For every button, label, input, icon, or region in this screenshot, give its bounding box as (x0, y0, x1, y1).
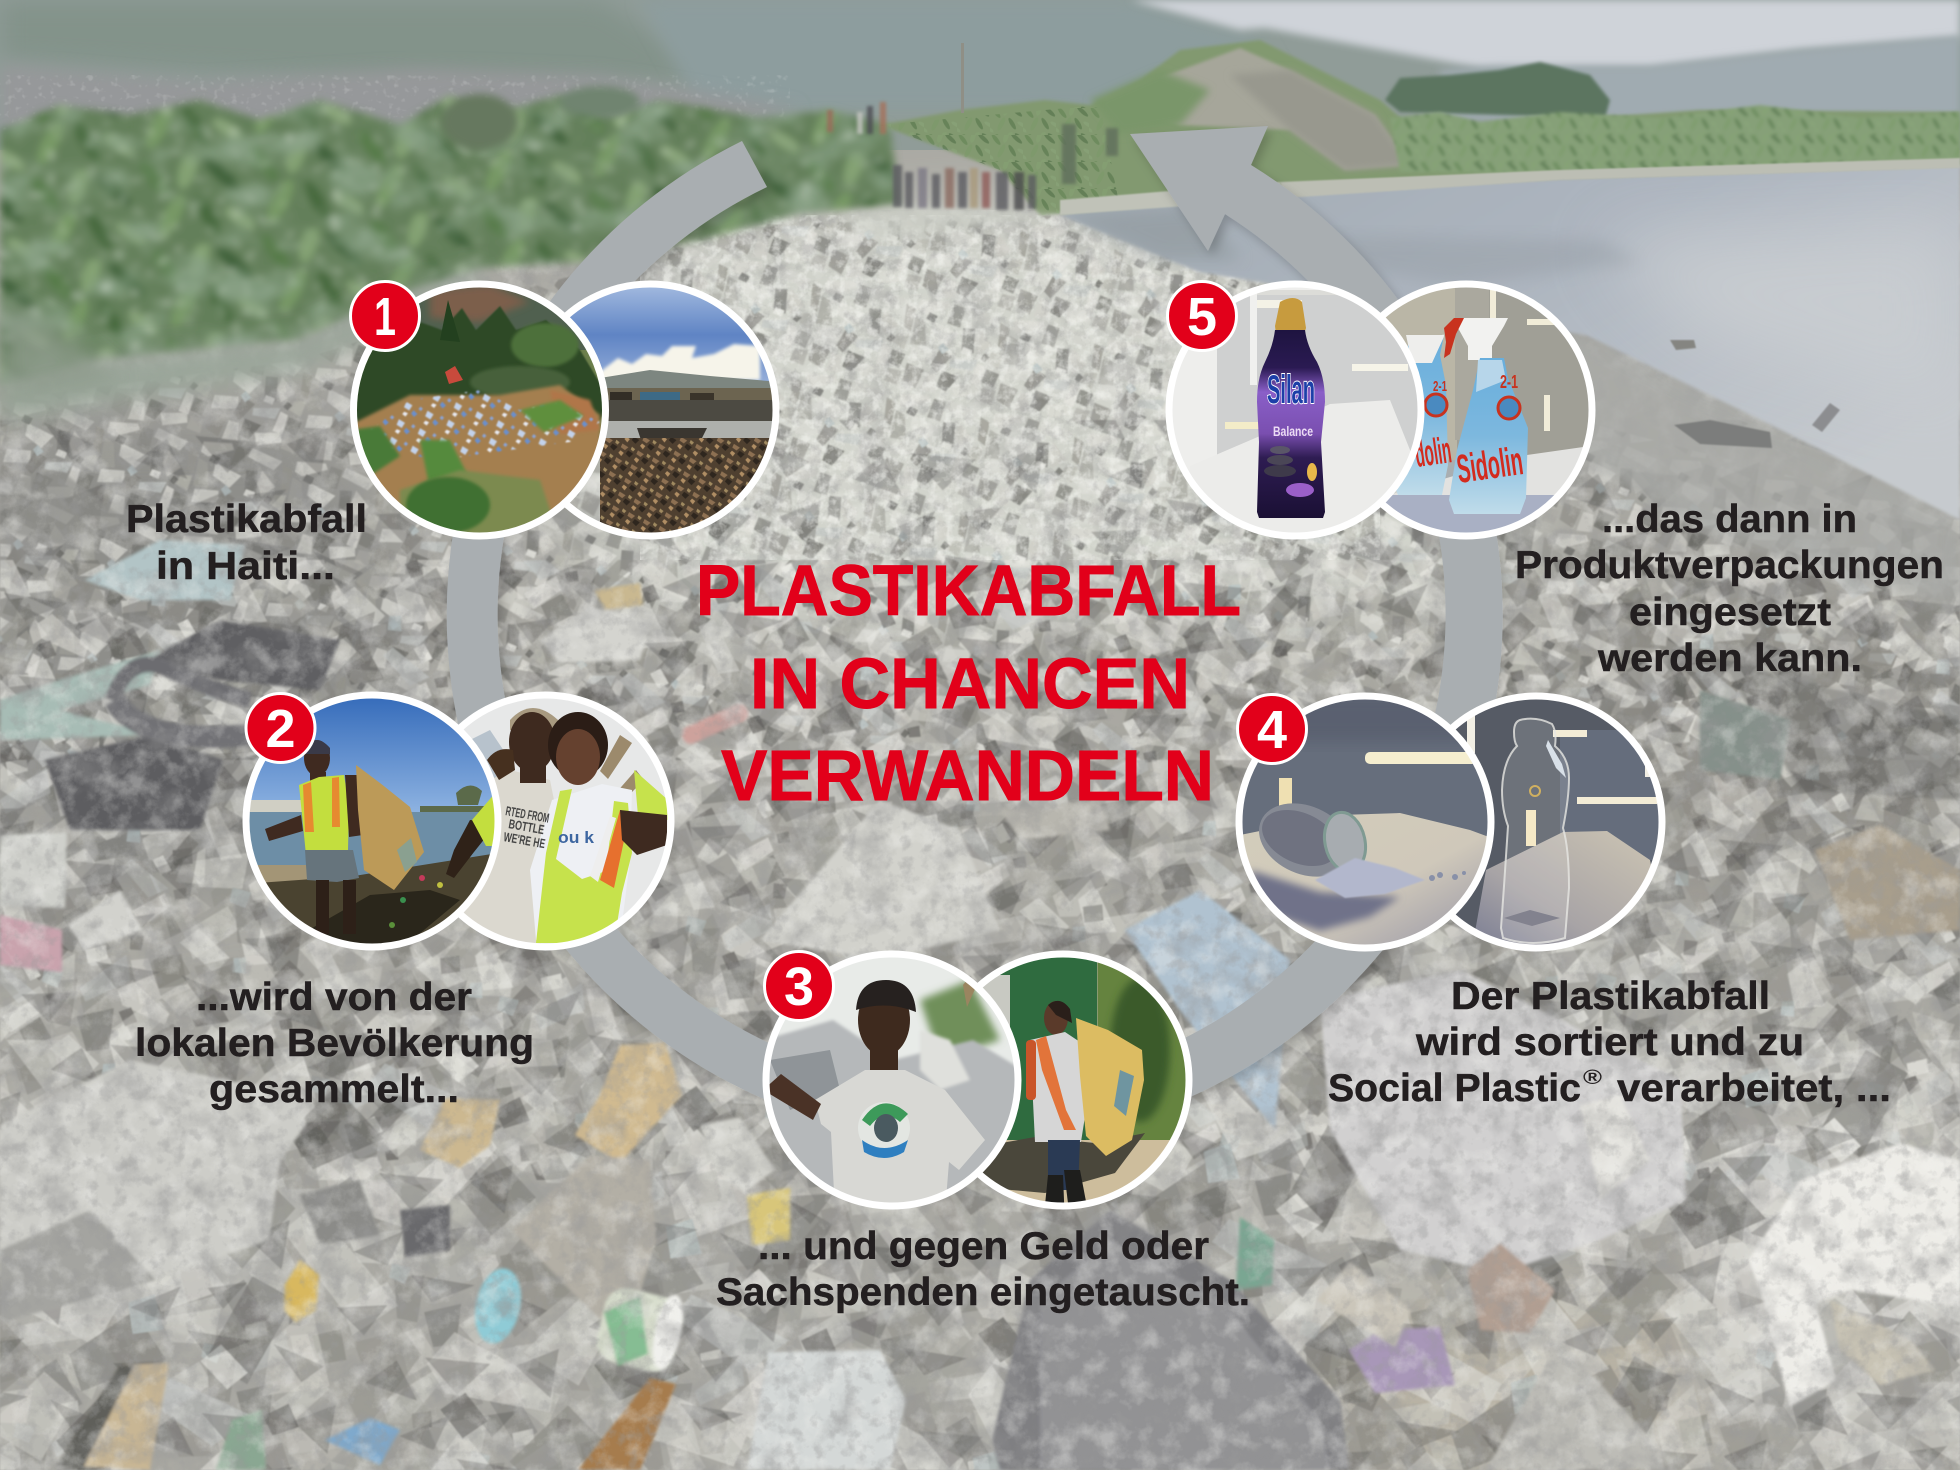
step 3 photos (763, 950, 1198, 1225)
cycle arrow ring (447, 126, 1503, 1143)
caption step 5 (1515, 498, 1944, 680)
photo: collector with sack at the water (250, 698, 494, 944)
step 1 photos (350, 280, 782, 542)
photo: Sidolin spray bottles: dolin (1412, 429, 1454, 475)
title (696, 552, 1241, 816)
number badge 1: 1 (374, 287, 396, 347)
photo: Silan softener bottle (1166, 280, 1426, 542)
title: VERWANDELN (721, 737, 1214, 816)
photo: Sidolin spray bottles: 2-1 (1433, 378, 1447, 395)
number badge 3 (764, 952, 834, 1020)
step 4 photos (1235, 690, 1670, 960)
caption step 2: ...wird von der (196, 976, 472, 1019)
photo: two collectors in neon vests: BOTTLE (507, 816, 546, 837)
photo: clear bottle (1405, 690, 1670, 960)
caption step 4: verarbeitet, ... (1617, 1067, 1891, 1110)
caption step 1: in Haiti... (156, 545, 335, 588)
caption step 4: ® (1583, 1067, 1602, 1089)
photo: two collectors in neon vests (464, 698, 668, 944)
number badge 3: 3 (784, 957, 814, 1017)
caption step 5: eingesetzt (1629, 591, 1831, 634)
caption step 3: Sachspenden eingetauscht. (716, 1271, 1250, 1314)
photo: Silan softener bottle: Silan (1267, 368, 1315, 412)
caption step 2: lokalen Bevölkerung (135, 1022, 534, 1065)
title: PLASTIKABFALL (696, 552, 1241, 631)
caption step 2: gesammelt... (209, 1068, 459, 1111)
photo: two collectors in neon vests: WE'RE HE (502, 829, 547, 851)
photo: man in Social Plastic shirt (763, 950, 1023, 1212)
caption step 3: ... und gegen Geld oder (758, 1225, 1209, 1268)
caption step 5: ...das dann in (1602, 498, 1857, 541)
caption step 2 (135, 976, 534, 1111)
step 2 photos (244, 690, 677, 962)
photo: Sidolin spray bottles: Sidolin (1454, 439, 1526, 492)
step 5 photos (1166, 280, 1600, 545)
caption step 4: Der Plastikabfall (1451, 975, 1770, 1018)
caption step 1 (126, 498, 367, 588)
photo: Sidolin spray bottles: 2-1 (1500, 372, 1518, 392)
caption step 4 (1328, 975, 1891, 1110)
photo: Sidolin spray bottles (1337, 280, 1600, 545)
photo: two collectors in neon vests: RTED FROM (504, 803, 550, 826)
title: IN CHANCEN (750, 645, 1190, 724)
photo: two collectors in neon vests: ou k (558, 828, 595, 847)
number badge 5 (1168, 282, 1236, 350)
photo: Silan softener bottle: Silan (1267, 368, 1315, 412)
number badge 4: 4 (1257, 700, 1287, 760)
photo: trash on green hillside (357, 288, 602, 532)
number badge 5: 5 (1187, 287, 1217, 347)
number badge 2: 2 (265, 699, 296, 759)
photo: Silan softener bottle: Balance (1273, 423, 1313, 439)
number badge 1 (350, 282, 420, 350)
number badge 2 (246, 694, 315, 762)
photo: jar of plastic flakes (1235, 692, 1497, 955)
caption step 4: Social Plastic (1328, 1067, 1581, 1110)
photo: polluted shore under blue sky (570, 288, 772, 532)
caption step 4: wird sortiert und zu (1415, 1021, 1804, 1064)
caption step 5: werden kann. (1597, 637, 1862, 680)
caption step 1: Plastikabfall (126, 498, 367, 541)
caption step 3 (716, 1225, 1250, 1314)
caption step 5: Produktverpackungen (1515, 544, 1944, 587)
number badge 4 (1238, 694, 1306, 764)
photo: woman carrying recycling sack (982, 958, 1186, 1202)
